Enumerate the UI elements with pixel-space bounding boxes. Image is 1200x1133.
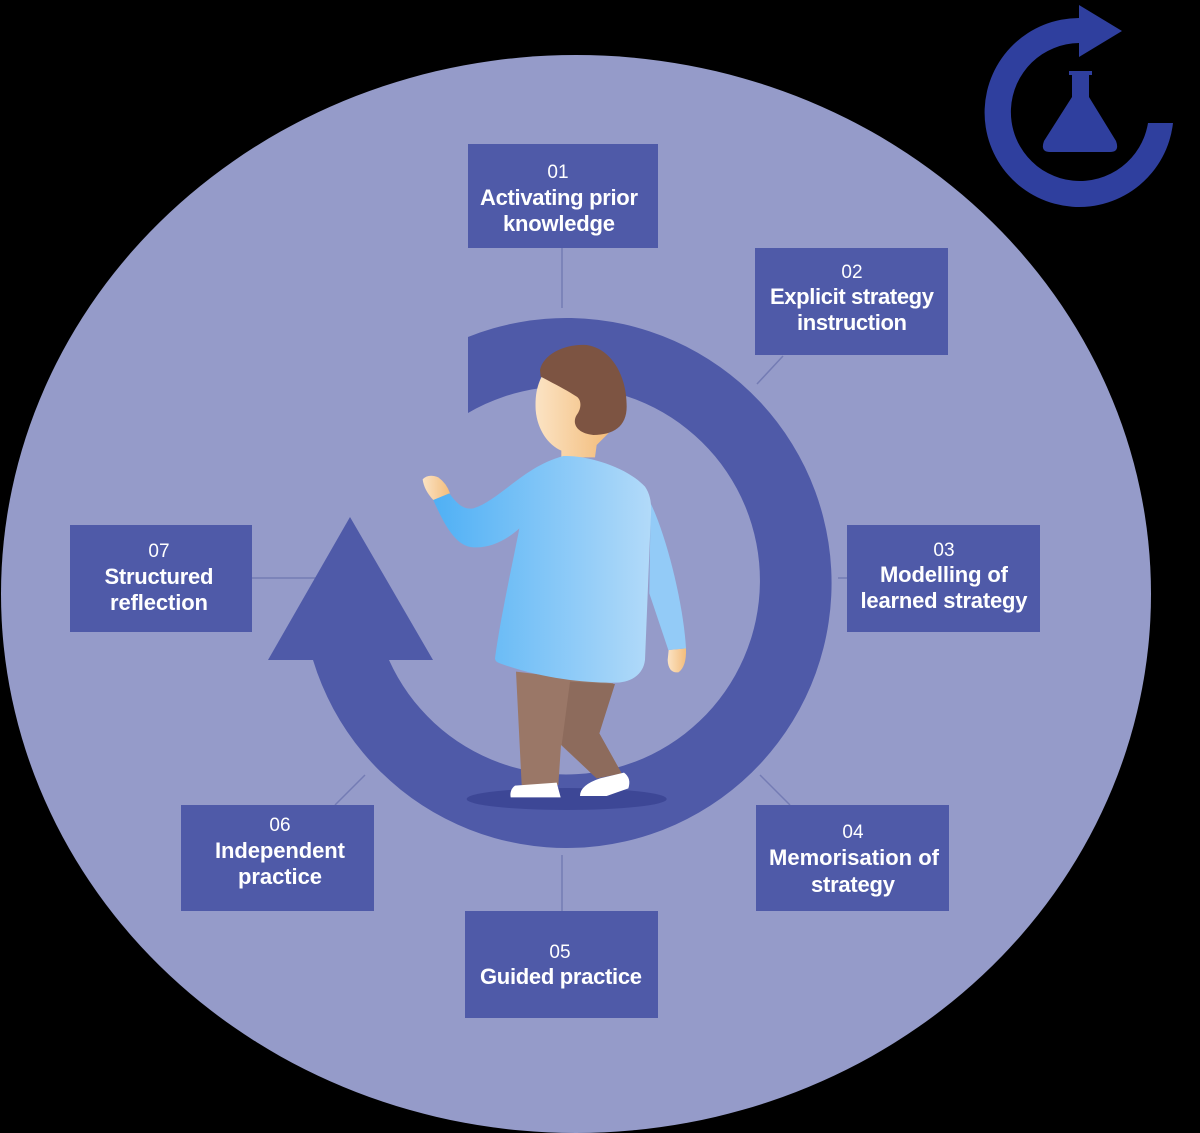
step 05: 05 [549,942,571,963]
step 02: Explicit strategy [770,284,935,309]
circular arrow [268,318,832,848]
step 03: Modelling of [880,562,1009,587]
step 05 [465,911,658,1018]
step 03: learned strategy [860,588,1028,613]
step 07: reflection [110,590,208,615]
step 04: 04 [842,822,864,843]
step 05: Guided practice [480,964,642,989]
step 01: Activating prior [480,185,638,210]
step 07: 07 [148,541,170,562]
step 01: 01 [547,162,569,183]
step 04: strategy [811,872,896,897]
step 02: 02 [841,262,863,283]
step 02: instruction [797,310,907,335]
step 06: Independent [215,838,346,863]
step 04 [756,805,949,911]
step 04: Memorisation of [769,845,940,870]
step 07: Structured [104,564,214,589]
step 01: knowledge [503,211,615,236]
step 07 [70,525,252,632]
icon: cycle arrow with flask [985,5,1173,207]
step 01 [468,144,658,248]
step 06: practice [238,864,322,889]
step 03 [847,525,1040,632]
step 03: 03 [933,540,955,561]
step 06 [181,805,374,911]
step 02 [755,248,948,355]
person figure [423,345,686,810]
step 06: 06 [269,815,291,836]
